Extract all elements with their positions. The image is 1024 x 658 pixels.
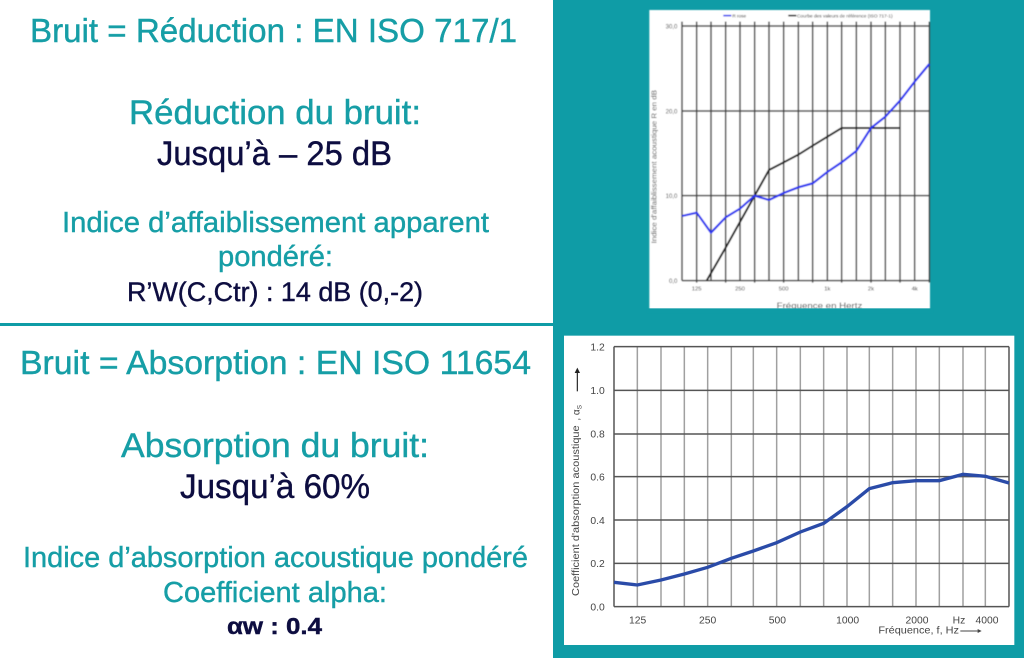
black reference curve (707, 128, 900, 281)
y axis title: Indice d'affaiblissement acoustique R en dB (649, 90, 658, 243)
value: alpha w: αw : 0.4 (227, 613, 322, 639)
x axis labels (692, 287, 918, 293)
y axis labels: 0.0 (590, 603, 605, 614)
x axis labels: 1000 (836, 615, 859, 626)
x axis labels (629, 615, 999, 626)
y axis labels: 1.2 (590, 343, 605, 354)
x axis labels: 250 (699, 615, 717, 626)
panel: noise absorption text (20, 344, 531, 639)
x axis labels: 2k (868, 287, 874, 293)
legend (723, 13, 893, 18)
label: alpha coefficient: Coefficient alpha: (163, 577, 387, 609)
heading: absorption standard: Bruit = Absorption : EN ISO 11654 (20, 344, 531, 381)
x axis labels: 2000 (906, 615, 929, 626)
blue absorption curve (614, 474, 1009, 585)
chart: sound absorption coefficient (564, 336, 1014, 645)
subheading: noise absorption: Absorption du bruit: (121, 427, 429, 465)
x axis labels: 4k (912, 287, 918, 293)
x axis labels: 500 (769, 615, 786, 626)
y axis labels: 30,0 (666, 24, 678, 30)
y axis labels (666, 24, 678, 285)
x axis labels: Hz (953, 615, 965, 626)
y axis labels: 0,0 (669, 279, 678, 285)
teal right background panel (553, 0, 1024, 658)
y axis labels: 20,0 (666, 109, 678, 115)
label: weighted apparent index line 2: pondéré: (218, 241, 333, 273)
heading: reduction standard: Bruit = Réduction : EN ISO 717/1 (30, 12, 517, 49)
chart: sound reduction index (647, 10, 933, 313)
x axis labels: 4000 (976, 615, 999, 626)
x axis labels: 125 (692, 287, 702, 293)
y axis labels: 1.0 (590, 386, 605, 397)
value: R'W rating: R’W(C,Ctr) : 14 dB (0,-2) (127, 277, 423, 307)
x axis labels: 500 (779, 287, 789, 293)
value: up to 60%: Jusqu’à 60% (180, 468, 370, 506)
y axis labels: 0.6 (590, 472, 605, 483)
legend: Courbe des valeurs de référence (ISO 717-1) (797, 13, 893, 18)
label: weighted apparent index line 1: Indice d’affaiblissement apparent (62, 207, 489, 239)
legend: R rose (732, 13, 746, 18)
y axis arrow (575, 368, 580, 391)
y axis labels: 10,0 (666, 194, 678, 200)
y axis labels: 0.8 (590, 429, 605, 440)
subheading: noise reduction: Réduction du bruit: (129, 94, 421, 132)
blue measured curve (682, 64, 929, 233)
y axis title: Coefficient d'absorption acoustique (571, 425, 582, 596)
y axis labels: 0.4 (590, 516, 605, 527)
label: weighted absorption index: Indice d’absorption acoustique pondéré (23, 542, 528, 574)
x axis labels: 250 (735, 287, 746, 293)
x axis labels: 125 (629, 615, 647, 626)
x axis labels: 1k (824, 287, 830, 293)
y axis labels (590, 343, 605, 614)
panel: noise reduction text (30, 12, 517, 307)
x axis title and arrow (878, 626, 982, 637)
value: up to 25 dB: Jusqu’à – 25 dB (157, 135, 392, 173)
x axis title and arrow: Fréquence, f, Hz (878, 626, 959, 637)
y axis symbol alpha s: S (577, 404, 584, 409)
x axis title: Fréquence en Hertz (777, 300, 862, 310)
horizontal divider between sections (0, 323, 553, 326)
y axis labels: 0.2 (590, 559, 605, 570)
y axis symbol alpha s: , α (572, 409, 583, 421)
